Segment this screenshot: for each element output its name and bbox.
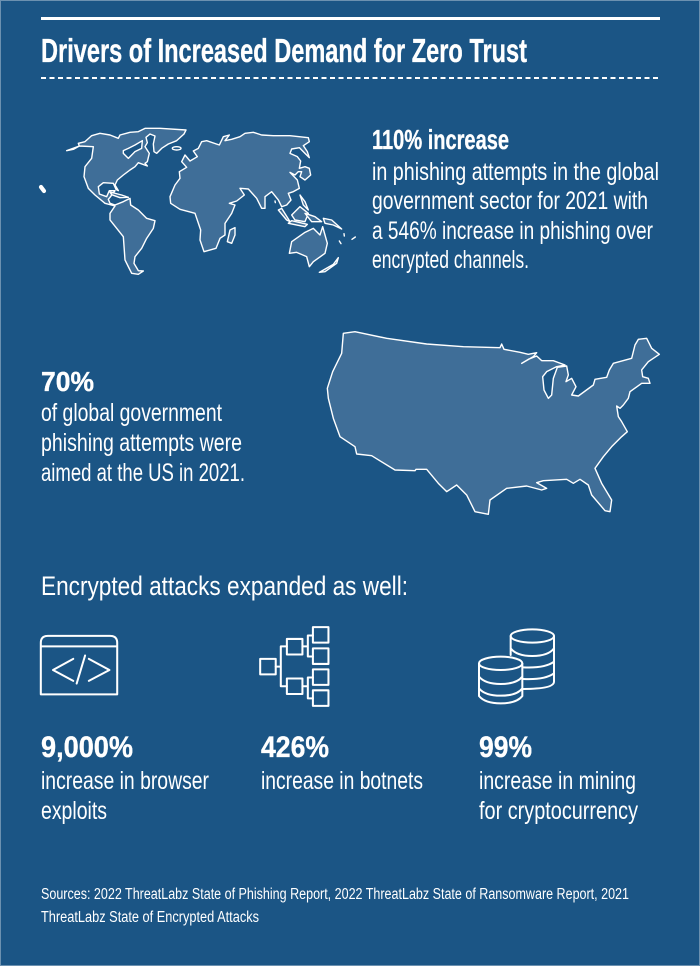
stat: browser exploits: increase in browser bbox=[41, 767, 209, 795]
stat: cryptocurrency mining: 99% bbox=[479, 731, 532, 764]
stat: 110% increase: encrypted channels. bbox=[372, 246, 529, 274]
stat: cryptocurrency mining: increase in mining bbox=[479, 767, 636, 795]
stat: 70%: aimed at the US in 2021. bbox=[41, 459, 245, 487]
sources: ThreatLabz State of Encrypted Attacks bbox=[41, 909, 259, 926]
stat: 70%: 70% bbox=[41, 366, 94, 397]
stat: cryptocurrency mining bbox=[479, 731, 638, 825]
stat: browser exploits: exploits bbox=[41, 797, 107, 825]
stat: 110% increase bbox=[372, 124, 659, 274]
icon: botnet tree bbox=[260, 627, 328, 706]
section heading: Encrypted attacks expanded as well: bbox=[41, 571, 408, 601]
sources bbox=[41, 886, 629, 926]
stat: 70%: of global government bbox=[41, 399, 222, 427]
icon: coin stacks bbox=[479, 629, 554, 703]
stat: botnets bbox=[261, 731, 423, 795]
stat: botnets: increase in botnets bbox=[261, 767, 423, 795]
stat: browser exploits: 9,000% bbox=[41, 731, 133, 764]
world map bbox=[41, 128, 355, 274]
stat: 110% increase: 110% increase bbox=[372, 124, 509, 155]
US map bbox=[327, 332, 659, 514]
stat: 70%: phishing attempts were bbox=[41, 429, 242, 457]
stat: browser exploits bbox=[41, 731, 209, 825]
stat: cryptocurrency mining: for cryptocurrency bbox=[479, 797, 638, 825]
icon: browser code bbox=[41, 636, 117, 694]
stat: 70% bbox=[41, 366, 245, 487]
stat: botnets: 426% bbox=[261, 731, 329, 764]
